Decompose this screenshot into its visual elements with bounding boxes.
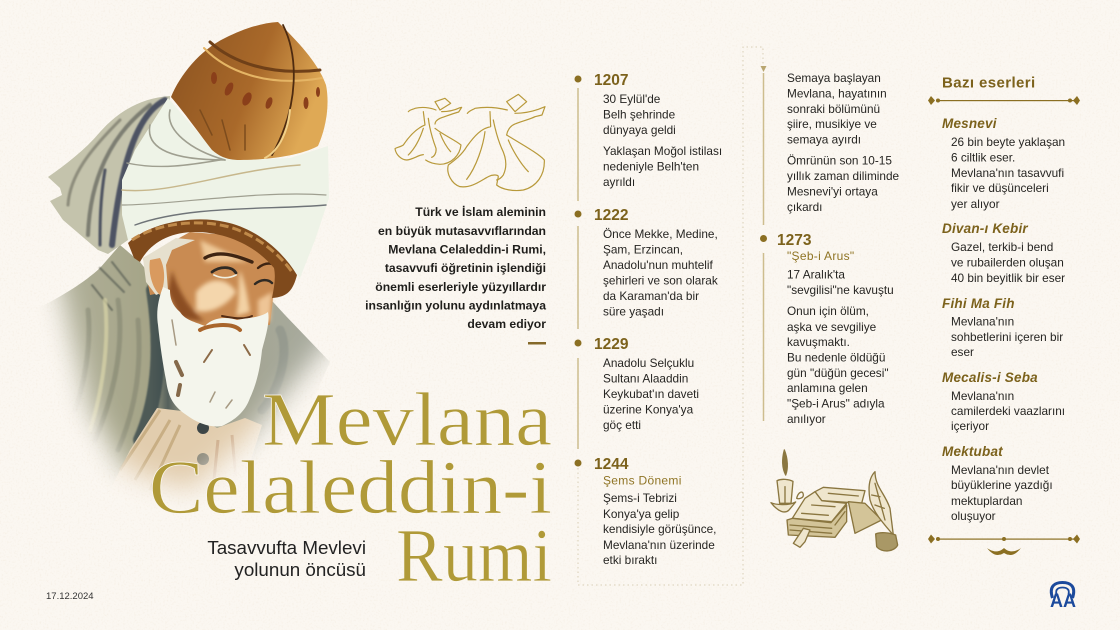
timeline: 1222: süre yaşadı <box>603 304 664 318</box>
work: Mesnevi: Mesnevi <box>942 116 997 131</box>
work: Divan-ı Kebir <box>942 221 1065 285</box>
work: Fihi Ma Fih: Mevlana'nın <box>951 314 1014 328</box>
timeline: continued text: Ömrünün son 10-15 <box>787 154 892 168</box>
timeline: continued text: sonraki bölümünü <box>787 102 880 116</box>
work: Mesnevi: Mevlana'nın tasavvufi <box>951 166 1064 180</box>
timeline: 1207: dünyaya geldi <box>603 123 676 137</box>
work: Mesnevi: 26 bin beyte yaklaşan <box>951 135 1065 149</box>
icon: candle, books and quill <box>771 450 898 551</box>
robe and collar <box>30 245 330 510</box>
timeline: 1229: 1229 <box>594 336 629 353</box>
sikke hat <box>171 22 328 160</box>
timeline: 1273: kavuşmaktı. <box>787 335 850 349</box>
timeline: continued text: semaya ayırdı <box>787 132 861 146</box>
work: Mecalis-i Seba: Mevlana'nın <box>951 389 1014 403</box>
timeline: 1244: Şems Dönemi <box>603 474 682 488</box>
work: Mecalis-i Seba: Mecalis-i Seba <box>942 370 1038 385</box>
intro paragraph: Türk ve İslam aleminin <box>415 204 546 219</box>
eyes and brows <box>205 254 280 318</box>
timeline: 1244: 1244 <box>594 456 629 473</box>
timeline: 1273: 1273 <box>777 232 812 249</box>
timeline: continued text: Mesnevi'yi ortaya <box>787 184 878 198</box>
main title: Mevlana <box>262 378 552 462</box>
ornament divider <box>928 96 1080 105</box>
timeline: 1244: Şems-i Tebrizi <box>603 491 677 505</box>
timeline: 1229: üzerine Konya'ya <box>603 402 694 416</box>
work: Divan-ı Kebir: Divan-ı Kebir <box>942 221 1028 236</box>
dotted timeline frame with arrow <box>578 47 766 585</box>
work: Divan-ı Kebir: ve rubailerden oluşan <box>951 256 1064 270</box>
work: Divan-ı Kebir: 40 bin beyitlik bir eser <box>951 271 1065 285</box>
timeline: 1273: Bu nedenle öldüğü <box>787 350 885 364</box>
timeline: 1273: "Şeb-i Arus" adıyla <box>787 396 885 410</box>
timeline: 1273: 17 Aralık'ta <box>787 268 845 282</box>
work: Mektubat: Mevlana'nın devlet <box>951 463 1050 477</box>
main title: Rumi <box>396 514 552 598</box>
work: Mesnevi <box>942 116 1065 211</box>
work: Mesnevi: 6 ciltlik eser. <box>951 150 1015 164</box>
icon: AA logo <box>1050 582 1076 612</box>
face <box>143 232 282 328</box>
intro paragraph: tasavvufi öğretinin işlendiği <box>385 261 546 275</box>
work: Fihi Ma Fih <box>942 296 1063 359</box>
ear and hair <box>143 238 195 295</box>
timeline: 1207: 1207 <box>594 72 628 89</box>
timeline: 1273: anılıyor <box>787 412 826 426</box>
timeline: 1222: şehirleri ve son olarak <box>603 274 718 288</box>
intro paragraph: insanlığın yolunu aydınlatmaya <box>365 298 546 312</box>
timeline: 1273: gün "düğün gecesi" <box>787 366 889 380</box>
timeline: 1207: Yaklaşan Moğol istilası <box>603 144 722 158</box>
main title: Celaleddin-i <box>149 446 552 530</box>
turban cloth tail <box>48 96 170 254</box>
portrait of Mevlana <box>30 22 330 510</box>
timeline: 1273: aşka ve sevgiliye <box>787 320 877 334</box>
work: Mecalis-i Seba: içeriyor <box>951 419 989 433</box>
timeline: continued text <box>764 71 900 225</box>
timeline: 1244 <box>574 456 716 567</box>
subtitle: Tasavvufta Mevlevi <box>207 537 366 558</box>
timeline: 1229: Keykubat'ın daveti <box>603 387 699 401</box>
intro closing dash <box>528 342 546 344</box>
intro paragraph <box>365 204 546 344</box>
timeline: 1207: 30 Eylül'de <box>603 92 661 106</box>
work: Mektubat: oluşuyor <box>951 509 996 523</box>
timeline: 1273 <box>760 232 894 426</box>
timeline: 1273: "sevgilisi"ne kavuştu <box>787 283 894 297</box>
timeline: continued text: Mevlana, hayatının <box>787 86 887 100</box>
timeline: 1222: Şam, Erzincan, <box>603 242 683 256</box>
intro paragraph: Mevlana Celaleddin-i Rumi, <box>388 242 546 256</box>
intro paragraph: önemli eserleriyle yüzyıllardır <box>375 280 546 294</box>
timeline: continued text: yıllık zaman diliminde <box>787 169 900 183</box>
timeline: 1273: anlamına gelen <box>787 381 868 395</box>
turban wrap <box>122 98 329 278</box>
timeline: 1222: Önce Mekke, Medine, <box>603 227 718 241</box>
timeline: 1229 <box>574 336 699 449</box>
work: Mecalis-i Seba <box>942 370 1065 433</box>
timeline: 1222: 1222 <box>594 207 628 224</box>
timeline: continued text: şiire, musikiye ve <box>787 117 877 131</box>
timeline: 1244: Konya'ya gelip <box>603 507 680 521</box>
work: Mesnevi: fikir ve düşünceleri <box>951 181 1049 195</box>
work: Mektubat: Mektubat <box>942 444 1003 459</box>
work: Mesnevi: yer alıyor <box>951 197 1000 211</box>
timeline: 1229: göç etti <box>603 418 641 432</box>
timeline: 1222: da Karaman'da bir <box>603 289 699 303</box>
timeline: 1244: Mevlana'nın üzerinde <box>603 538 715 552</box>
work: Fihi Ma Fih: Fihi Ma Fih <box>942 296 1015 311</box>
icon: AA logo: AA <box>1050 591 1076 612</box>
timeline: 1222: Anadolu'nun muhtelif <box>603 258 714 272</box>
date: 17.12.2024 <box>46 591 94 602</box>
work: Fihi Ma Fih: eser <box>951 345 974 359</box>
timeline: 1244: etki bıraktı <box>603 553 657 567</box>
timeline: 1222 <box>574 207 718 329</box>
subtitle: yolunun öncüsü <box>234 559 366 580</box>
timeline: 1207 <box>574 72 722 201</box>
timeline: continued text: çıkardı <box>787 200 822 214</box>
turban brown band <box>128 219 297 298</box>
timeline: 1229: Anadolu Selçuklu <box>603 356 694 370</box>
bottom ornament <box>928 534 1080 555</box>
timeline: 1207: ayrıldı <box>603 175 635 189</box>
work: Mecalis-i Seba: camilerdeki vaazlarını <box>951 404 1065 418</box>
heading: some works <box>928 74 1080 105</box>
timeline: 1207: nedeniyle Belh'ten <box>603 160 699 174</box>
timeline: 1273: "Şeb-i Arus" <box>787 249 854 263</box>
icon: whirling dervishes <box>395 94 545 191</box>
work: Mektubat: mektuplardan <box>951 494 1022 508</box>
intro paragraph: devam ediyor <box>467 317 546 331</box>
heading: some works: Bazı eserleri <box>942 74 1036 92</box>
beard <box>157 287 269 426</box>
timeline: continued text: Semaya başlayan <box>787 71 881 85</box>
timeline: 1229: Sultanı Alaaddin <box>603 372 688 386</box>
work: Fihi Ma Fih: sohbetlerini içeren bir <box>951 330 1063 344</box>
work: Mektubat <box>942 444 1053 523</box>
work: Divan-ı Kebir: Gazel, terkib-i bend <box>951 240 1053 254</box>
subtitle <box>207 537 366 580</box>
timeline: 1244: kendisiyle görüşünce, <box>603 522 716 536</box>
main title <box>149 378 552 598</box>
work: Mektubat: büyüklerine yazdığı <box>951 478 1053 492</box>
intro paragraph: en büyük mutasavvıflarından <box>378 224 546 238</box>
timeline: 1207: Belh şehrinde <box>603 108 676 122</box>
timeline: 1273: Onun için ölüm, <box>787 304 869 318</box>
